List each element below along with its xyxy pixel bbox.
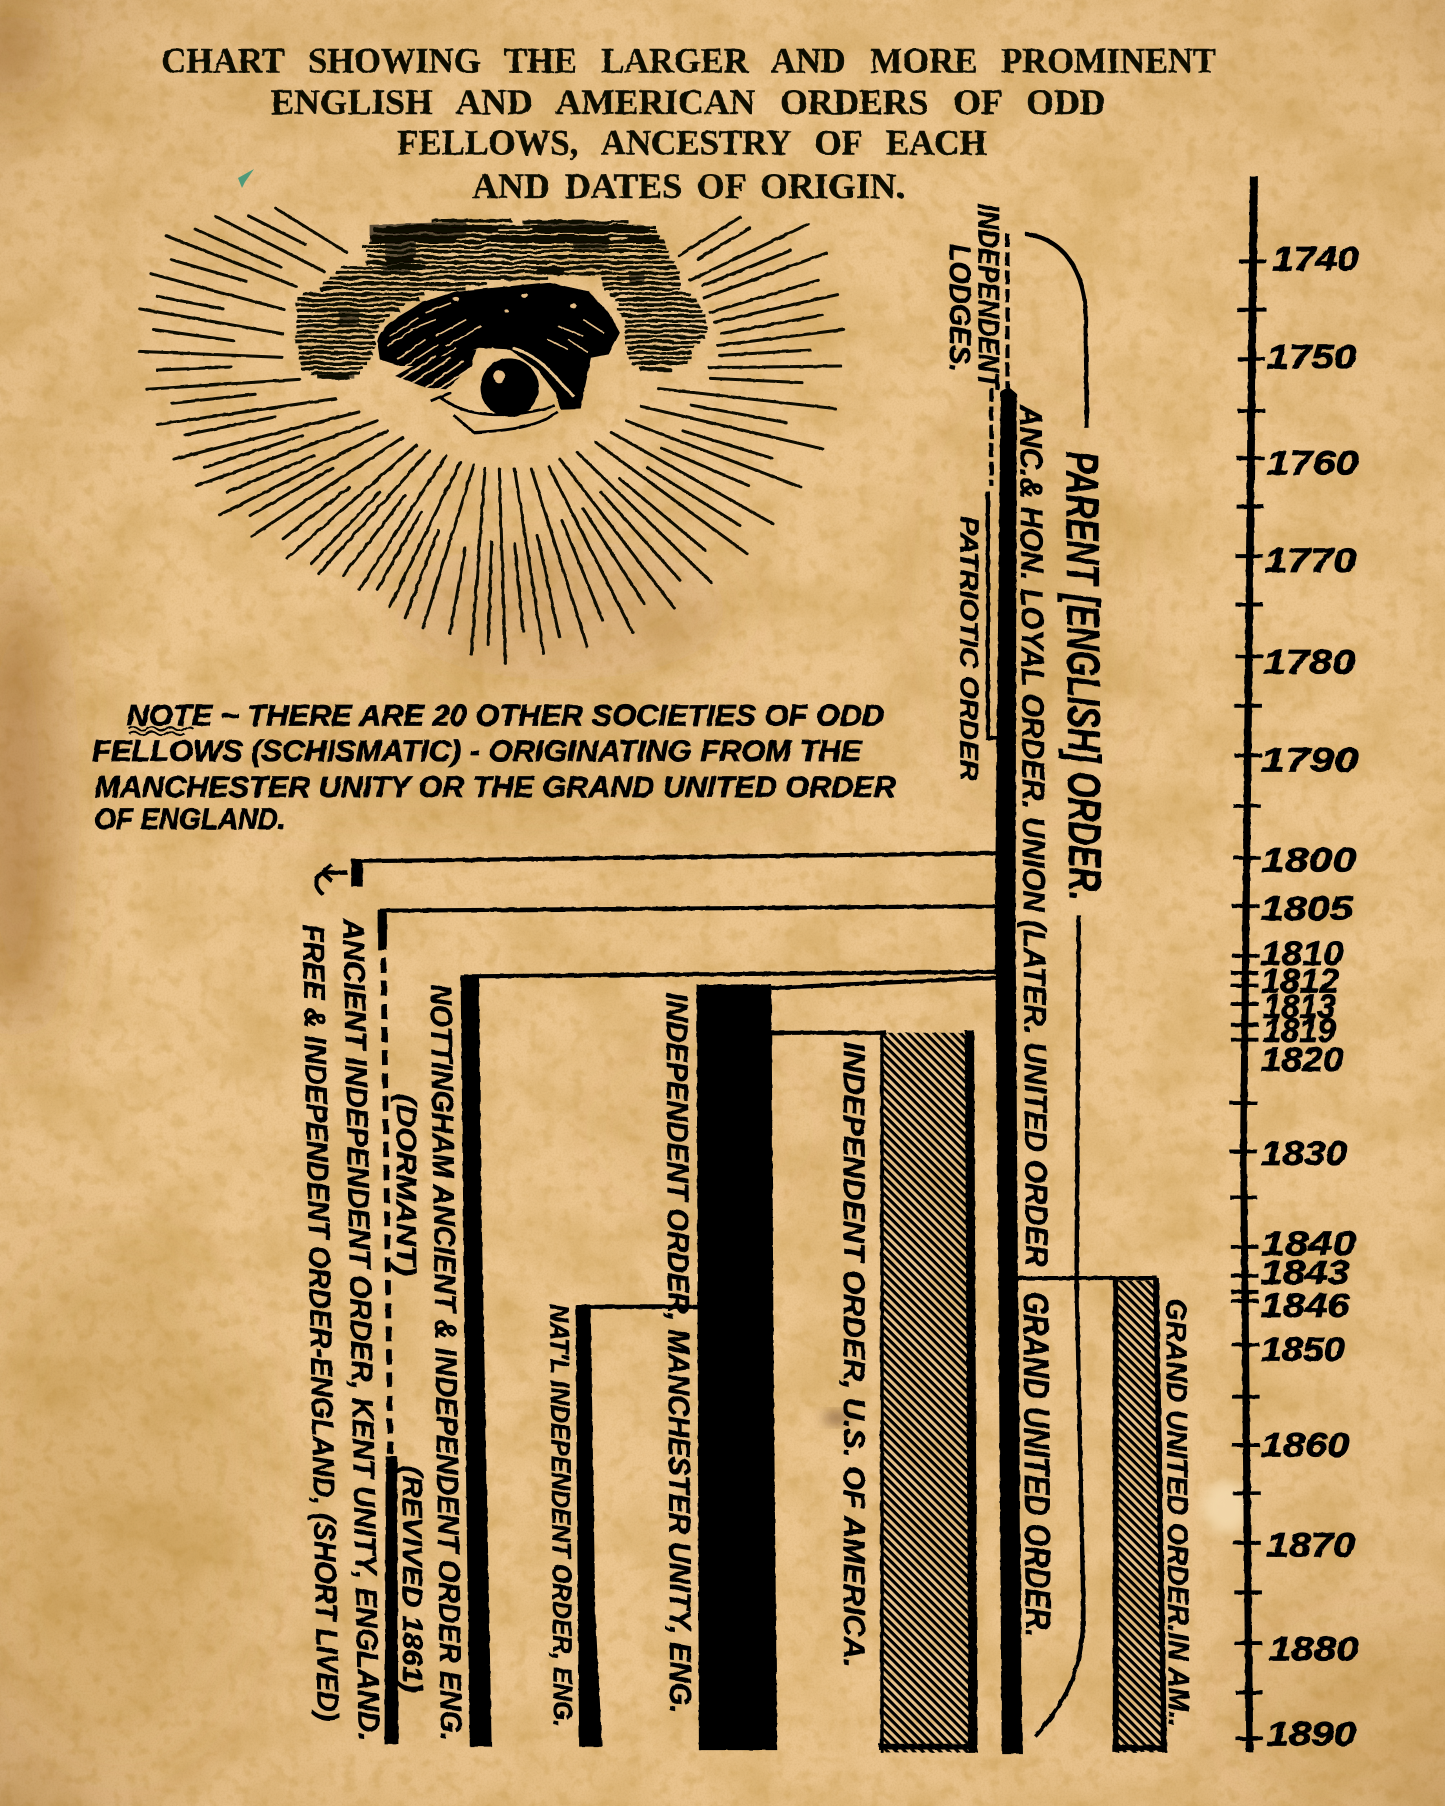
note text: FELLOWS (SCHISMATIC) - ORIGINATING FROM THE: [92, 735, 862, 768]
eye rays: [140, 208, 844, 663]
grand united order in america hatched bar: [1113, 1278, 1166, 1752]
vertical order labels: INDEPENDENT ORDER, U.S. OF AMERICA.: [837, 1042, 870, 1667]
year labels: 1870: [1267, 1527, 1355, 1565]
national independent order bar: [576, 1305, 602, 1747]
year labels: 1840: [1261, 1225, 1356, 1263]
us independent order hatched bar: [879, 1031, 978, 1752]
vertical order labels: GRAND UNITED ORDER.: [1016, 1292, 1058, 1637]
year labels: 1820: [1261, 1041, 1344, 1079]
year labels: 1790: [1261, 741, 1359, 779]
title: FELLOWS, ANCESTRY OF EACH: [397, 122, 987, 162]
year labels: 1780: [1263, 644, 1355, 682]
year labels: 1770: [1264, 542, 1356, 580]
year labels: 1750: [1267, 338, 1356, 376]
year labels: 1805: [1261, 890, 1354, 928]
free and independent order stub: [352, 859, 362, 887]
main parent order stem: [995, 387, 1022, 1754]
patriotic order line: [988, 492, 999, 738]
note text: OF ENGLAND.: [94, 803, 286, 836]
timeline axis with tick marks: [1230, 176, 1267, 1752]
vertical order labels: GRAND UNITED ORDER.IN AM..: [1159, 1299, 1194, 1727]
title: ENGLISH AND AMERICAN ORDERS OF ODD: [271, 82, 1105, 122]
branch connector lines: [355, 853, 1157, 1307]
title: CHART SHOWING THE LARGER AND MORE PROMINENT: [161, 41, 1216, 81]
year labels: 1843: [1261, 1254, 1349, 1292]
vertical order labels: INDEPENDENT: [972, 204, 1005, 390]
year labels: 1760: [1267, 444, 1359, 482]
ancient independent order stem: [382, 910, 398, 1744]
year labels: 1812: [1261, 963, 1339, 1001]
year labels: 1850: [1261, 1331, 1345, 1369]
year labels: 1830: [1261, 1135, 1347, 1173]
manchester unity bar: [697, 984, 777, 1750]
year labels: 1800: [1261, 842, 1356, 880]
brow shadow and eye: [329, 222, 644, 432]
vertical order labels: LODGES.: [943, 244, 976, 372]
year labels: 1813: [1263, 988, 1336, 1026]
year labels: 1740: [1272, 241, 1359, 279]
vertical order labels: ANC.& HON. LOYAL ORDER. UNION (LATER. UNITED ORDER: [1013, 404, 1054, 1267]
vertical order labels: NAT'L INDEPENDENT ORDER, ENG.: [544, 1304, 578, 1727]
year labels: 1890: [1267, 1716, 1356, 1754]
vertical order labels: (REVIVED 1861): [397, 1466, 428, 1693]
vertical order labels: PARENT [ENGLISH] ORDER.: [1056, 451, 1111, 900]
year labels: 1860: [1261, 1427, 1349, 1465]
year labels: 1880: [1269, 1630, 1359, 1668]
arrow to free and independent order: [316, 865, 348, 895]
vertical order labels: INDEPENDENT ORDER, MANCHESTER UNITY, ENG.: [660, 992, 696, 1713]
vertical order labels: FREE & INDEPENDENT ORDER-ENGLAND, (SHORT LIVED): [296, 924, 344, 1721]
nottingham order bar: [461, 975, 492, 1747]
note text: [92, 699, 896, 836]
all-seeing eye illustration: [140, 208, 844, 663]
year labels: 1810: [1261, 935, 1344, 973]
independent lodges dashed lines: [991, 234, 1007, 486]
title: AND DATES OF ORIGIN.: [472, 166, 905, 206]
vertical order labels: (DORMANT): [391, 1094, 422, 1276]
vertical order labels: NOTTINGHAM ANCIENT & INDEPENDENT ORDER ENG.: [424, 984, 467, 1741]
title: [161, 41, 1216, 206]
note underline squiggle: [129, 727, 193, 735]
vertical order labels: [296, 204, 1194, 1741]
year labels: [1261, 241, 1359, 1754]
vertical order labels: PATRIOTIC ORDER: [954, 516, 982, 781]
vertical order labels: ANCIENT INDEPENDENT ORDER, KENT UNITY, ENGLAND.: [336, 917, 385, 1741]
year labels: 1819: [1263, 1012, 1336, 1050]
note text: MANCHESTER UNITY OR THE GRAND UNITED ORDER: [94, 771, 896, 804]
note text: NOTE ~ THERE ARE 20 OTHER SOCIETIES OF ODD: [127, 699, 884, 732]
eyebrow hatching: [296, 221, 705, 377]
year labels: 1846: [1261, 1287, 1350, 1325]
parent order brace lines: [1025, 234, 1087, 1736]
